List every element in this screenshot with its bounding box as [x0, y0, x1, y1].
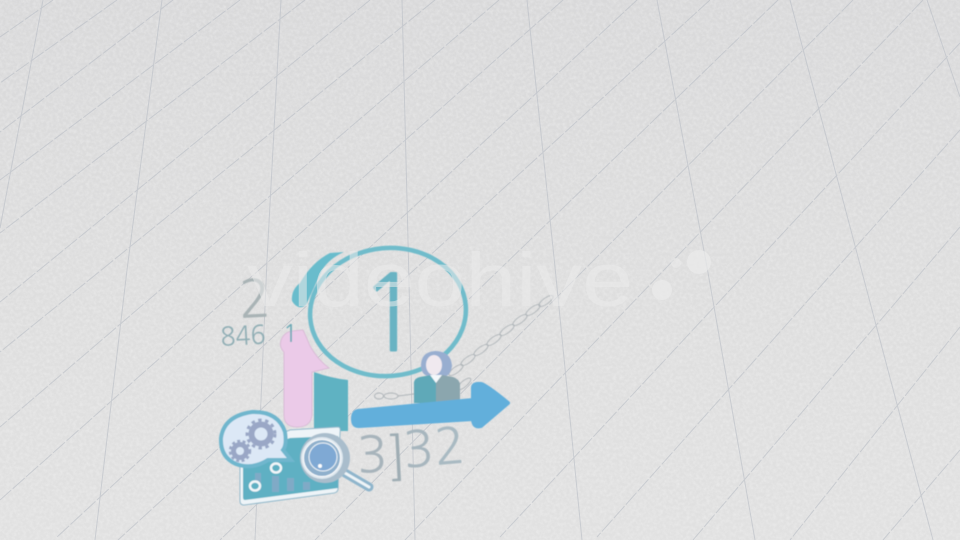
numbers 3 ] 3 2: 3: [356, 429, 389, 481]
blue arrow: [353, 384, 508, 426]
person icon: [414, 351, 460, 403]
speech bubble with gears: [221, 412, 291, 466]
gear small: [230, 441, 250, 461]
teal arc behind circle: [292, 252, 344, 307]
numeral 1: 1: [358, 261, 422, 367]
numbers 3 ] 3 2: ]: [387, 432, 408, 483]
infographic cluster: [220, 241, 555, 505]
big circle with 1: [305, 241, 471, 383]
tablet panel: [240, 427, 340, 505]
numbers 3 ] 3 2: 3: [401, 424, 436, 476]
numbers 3 ] 3 2: 2: [432, 421, 467, 473]
number 846: 846: [220, 322, 266, 350]
gear large: [247, 420, 275, 448]
number 2: 2: [238, 272, 272, 326]
teal bar: [314, 372, 348, 431]
magnifier icon: [300, 433, 369, 487]
numbers 3 ] 3 2: [356, 421, 467, 483]
chain: [374, 294, 555, 399]
watermark: [247, 238, 711, 323]
number small 1: 1: [283, 322, 298, 346]
watermark: videohive: [247, 238, 633, 323]
pink bar: [280, 330, 329, 427]
